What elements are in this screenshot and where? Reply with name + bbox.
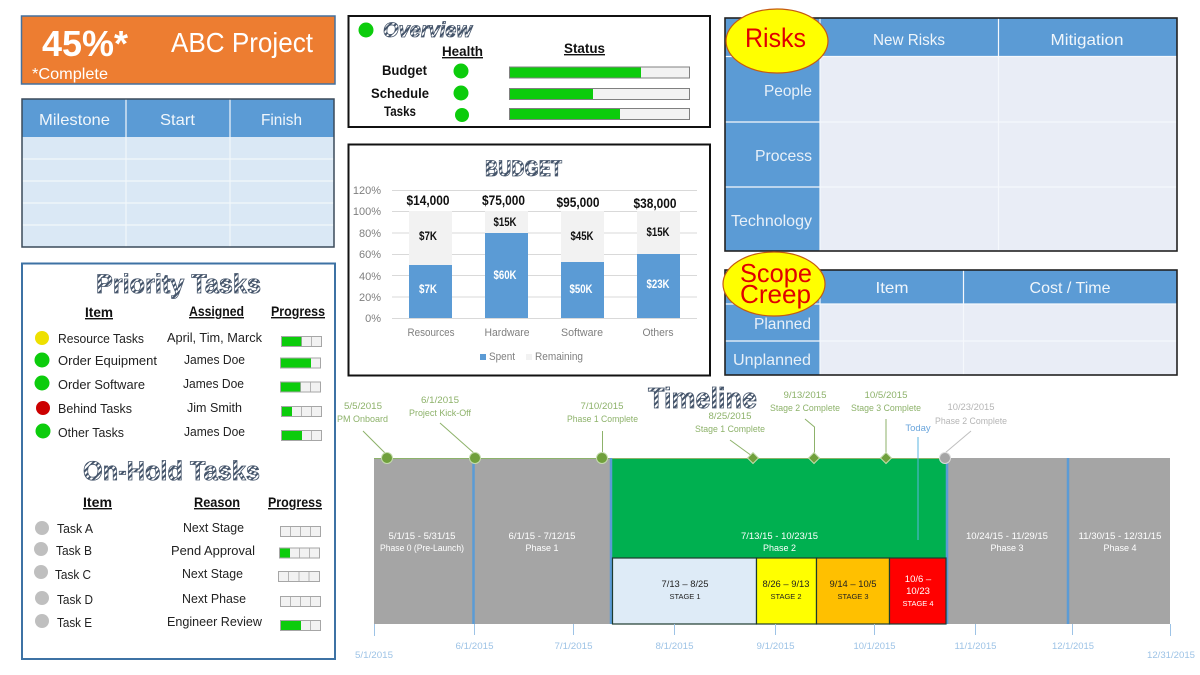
panel: risks table [725, 9, 1177, 251]
phase 0 label [380, 531, 464, 553]
budget heading: BUDGET [485, 156, 562, 181]
stage 2: STAGE 2 [770, 592, 802, 601]
row: schedule [371, 85, 690, 101]
chart legend: Spent [489, 351, 515, 363]
bar: resources: $14,000 [406, 192, 450, 208]
today marker: Today [905, 423, 931, 434]
priority row: order equipment: Order Equipment [58, 353, 157, 368]
on-hold row: task d: Task D [57, 592, 93, 607]
complete footnote: *Complete [32, 66, 108, 83]
on-hold row: task b [34, 542, 320, 558]
phase 1 label: 6/1/15 - 7/12/15 [508, 531, 576, 541]
on-hold row: task c: Task C [55, 567, 91, 582]
bar: hardware: $75,000 [482, 192, 525, 208]
phase 2 label: 7/13/15 - 10/23/15 [741, 531, 818, 541]
scope row labels [733, 316, 811, 369]
bar: software [556, 194, 604, 339]
milestone: phase 2 complete: Phase 2 Complete [935, 416, 1007, 427]
row: budget: Budget [382, 62, 427, 78]
bar: hardware [482, 192, 530, 339]
phase 3 label: Phase 3 [990, 543, 1024, 553]
badge: risks: Risks [745, 23, 806, 53]
on-hold row: task c: Next Stage [182, 566, 243, 581]
bar: software: Software [561, 327, 603, 339]
bar: others: $15K [646, 225, 670, 239]
date axis [355, 624, 1195, 661]
overview heading: Overview [383, 19, 474, 42]
phase 4 label: Phase 4 [1103, 543, 1137, 553]
on-hold row: task c [34, 565, 320, 582]
priority row: resource tasks: April, Tim, Marck [167, 330, 262, 345]
risks row labels: Process [755, 148, 812, 165]
y axis: 80% [359, 228, 381, 240]
milestone header labels: Finish [261, 112, 302, 129]
chart legend: Remaining [535, 351, 583, 363]
phase 3 label: 10/24/15 - 11/29/15 [966, 531, 1048, 541]
milestone: stage 3 complete: 10/5/2015 [864, 390, 908, 401]
y axis: 0% [365, 313, 381, 325]
date axis: 11/1/2015 [954, 641, 996, 652]
on-hold row: task e: Task E [57, 615, 92, 630]
on-hold row: task b: Task B [56, 543, 92, 558]
y axis: 40% [359, 271, 381, 283]
panel: scope creep table [723, 252, 1177, 375]
badge: risks [726, 9, 828, 73]
stage 4: STAGE 4 [902, 599, 934, 608]
phase 1 label [508, 531, 576, 553]
date axis: 12/1/2015 [1052, 641, 1094, 652]
on-hold row: task d [35, 591, 320, 607]
risks row labels: Technology [731, 213, 812, 230]
today marker [905, 423, 931, 540]
on-hold column headings [83, 494, 322, 510]
milestone: stage 2 complete: 9/13/2015 [784, 390, 826, 401]
on-hold row: task a [35, 520, 320, 536]
bar: others [634, 195, 680, 339]
on-hold row: task e [35, 614, 320, 630]
stage 2: 8/26 – 9/13 [762, 579, 810, 590]
bar: resources [406, 192, 455, 339]
y axis: 20% [359, 292, 381, 304]
y axis: 120% [353, 185, 381, 197]
priority row: behind tasks [36, 400, 322, 416]
date axis: 10/1/2015 [854, 641, 896, 652]
stage 4: 10/23 [906, 586, 930, 597]
on-hold column headings: Item [83, 494, 112, 510]
row: schedule: Schedule [371, 85, 429, 101]
scope row labels: Unplanned [733, 352, 811, 369]
milestone: stage 3 complete: Stage 3 Complete [851, 403, 921, 414]
priority column headings: Progress [271, 303, 325, 319]
bar: resources: $7K [419, 282, 437, 296]
milestone: project kick-off: Project Kick-Off [409, 408, 471, 419]
bar: resources: $7K [419, 229, 437, 243]
milestone: stage 3 complete [851, 390, 921, 464]
chart legend [480, 351, 583, 363]
stage 1: 7/13 – 8/25 [662, 579, 708, 590]
phase 0 label: 5/1/15 - 5/31/15 [388, 531, 456, 541]
priority row: resource tasks: Resource Tasks [58, 331, 144, 346]
date axis: 9/1/2015 [756, 641, 794, 652]
milestone: project kick-off [409, 395, 480, 464]
milestone header labels: Start [160, 112, 196, 129]
risks row labels: People [764, 83, 812, 100]
bar: others: $38,000 [634, 195, 677, 211]
on-hold row: task e: Engineer Review [167, 614, 263, 629]
panel: milestone table [22, 99, 334, 247]
bar: hardware: $15K [494, 215, 517, 229]
risks column headings [873, 32, 1124, 49]
health column heading: Health [442, 43, 483, 59]
row: tasks: Tasks [384, 103, 416, 119]
on-hold column headings: Reason [194, 494, 240, 510]
panel: timeline [337, 383, 1195, 661]
priority row: other tasks [36, 424, 322, 440]
phase bars [374, 458, 1170, 624]
phase 0 label: Phase 0 (Pre-Launch) [380, 543, 464, 553]
priority row: other tasks: James Doe [184, 424, 245, 439]
bar: software: $50K [570, 282, 593, 296]
scope row labels: Planned [754, 316, 811, 333]
bar: resources: Resources [408, 327, 455, 339]
bar: others: $23K [646, 277, 670, 291]
milestone: pm onboard [337, 401, 392, 464]
milestone: phase 1 complete: 7/10/2015 [580, 401, 624, 412]
priority row: order equipment: James Doe [184, 352, 245, 367]
bar: others: Others [642, 327, 674, 339]
stage 1 [612, 558, 756, 624]
percent complete: 45%* [42, 23, 128, 64]
milestone: stage 2 complete [770, 390, 840, 464]
priority row: order software: James Doe [183, 376, 244, 391]
milestone: phase 2 complete: 10/23/2015 [948, 402, 994, 413]
on-hold tasks heading: On-Hold Tasks [83, 456, 260, 486]
y axis: 60% [359, 249, 381, 261]
milestone header labels [39, 112, 302, 129]
priority row: behind tasks: Jim Smith [187, 400, 242, 415]
milestone: stage 1 complete: Stage 1 Complete [695, 424, 765, 435]
on-hold row: task b: Pend Approval [171, 543, 255, 558]
stage 3: STAGE 3 [837, 592, 869, 601]
risks column headings: Mitigation [1050, 32, 1124, 49]
milestone: phase 1 complete: Phase 1 Complete [567, 414, 638, 425]
date axis: 5/1/2015 [355, 650, 393, 661]
phase 2 label: Phase 2 [763, 543, 796, 553]
timeline heading: Timeline [648, 383, 757, 415]
scope column headings [876, 280, 1111, 297]
phase 1 label: Phase 1 [525, 543, 559, 553]
priority row: behind tasks: Behind Tasks [58, 401, 132, 416]
priority row: order software [34, 376, 320, 392]
priority tasks heading: Priority Tasks [96, 269, 261, 299]
priority column headings: Item [85, 304, 113, 320]
y axis [353, 185, 697, 325]
bar: hardware: Hardware [484, 327, 530, 339]
y axis: 100% [353, 206, 381, 218]
status column heading: Status [564, 40, 605, 56]
project name: ABC Project [171, 27, 313, 58]
stage 1: STAGE 1 [669, 592, 701, 601]
icon: overall health [358, 22, 374, 38]
on-hold row: task d: Next Phase [182, 591, 246, 606]
stage 3 [816, 558, 890, 624]
milestone: phase 2 complete [935, 402, 1007, 464]
panel: project header [22, 16, 335, 84]
priority column headings: Assigned [189, 303, 244, 319]
scope column headings: Item [876, 280, 908, 297]
date axis: 12/31/2015 [1147, 650, 1195, 661]
priority column headings [85, 303, 325, 320]
on-hold row: task a: Task A [57, 521, 93, 536]
milestone: stage 2 complete: Stage 2 Complete [770, 403, 840, 414]
risks column headings: New Risks [873, 32, 945, 49]
date axis: 7/1/2015 [554, 641, 592, 652]
on-hold column headings: Progress [268, 494, 322, 510]
phase 4 label: 11/30/15 - 12/31/15 [1078, 531, 1162, 541]
phase 4 label [1078, 531, 1162, 553]
phase 3 label [966, 531, 1048, 553]
bar: software: $45K [570, 229, 594, 243]
date axis: 8/1/2015 [656, 641, 694, 652]
milestone: stage 1 complete [695, 411, 765, 464]
row: tasks [384, 103, 690, 122]
stage 3: 9/14 – 10/5 [830, 579, 876, 590]
priority row: other tasks: Other Tasks [58, 425, 124, 440]
priority row: resource tasks [35, 330, 322, 346]
scope column headings: Cost / Time [1030, 280, 1111, 297]
panel: tasks [22, 264, 335, 659]
milestone: project kick-off: 6/1/2015 [421, 395, 459, 406]
stage 4 [890, 558, 946, 624]
stage 2 [756, 558, 816, 624]
risks row labels [731, 83, 812, 230]
milestone: stage 1 complete: 8/25/2015 [708, 411, 752, 422]
priority row: order software: Order Software [58, 377, 145, 392]
priority row: order equipment [34, 352, 320, 368]
badge: scope creep: Scope [740, 258, 812, 288]
panel: budget chart [348, 144, 710, 376]
milestone: pm onboard: 5/5/2015 [344, 401, 382, 412]
milestone header labels: Milestone [39, 112, 110, 129]
bar: software: $95,000 [556, 194, 600, 210]
on-hold row: task a: Next Stage [183, 520, 244, 535]
milestone: phase 1 complete [567, 401, 638, 464]
date axis: 6/1/2015 [456, 641, 494, 652]
bar: hardware: $60K [494, 268, 517, 282]
badge: scope creep: Creep [740, 279, 811, 309]
phase 2 label [741, 531, 818, 553]
milestone: pm onboard: PM Onboard [337, 414, 388, 425]
stage 4: 10/6 – [905, 574, 932, 585]
panel: overview [348, 16, 710, 127]
row: budget [382, 62, 690, 78]
badge: scope creep [723, 252, 825, 316]
